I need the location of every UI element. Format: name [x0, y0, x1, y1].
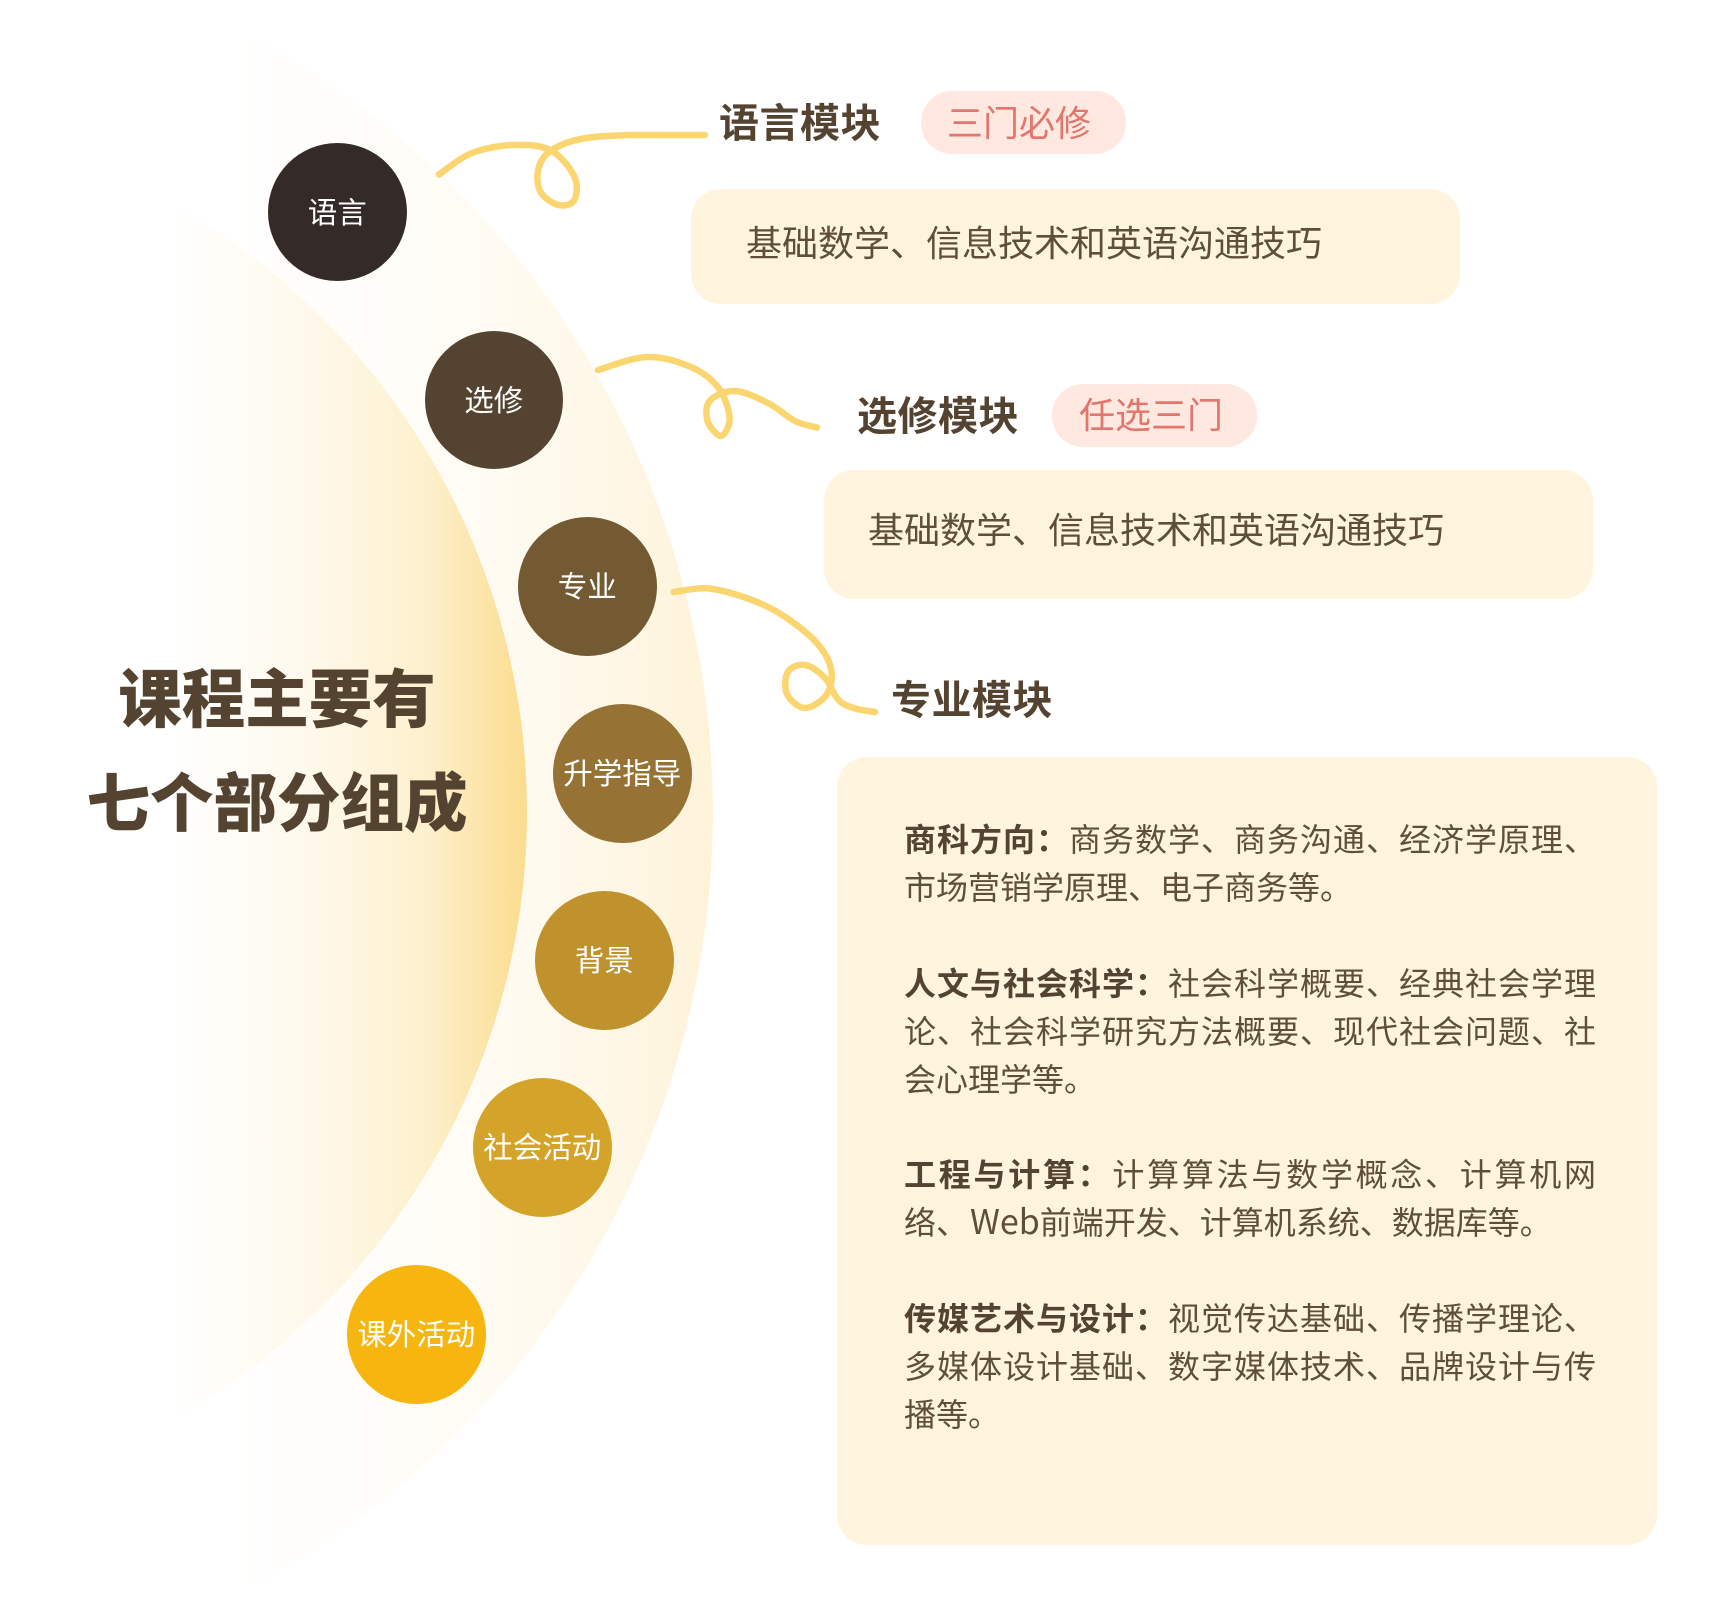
text: major module details: 会心理学等。 — [904, 1062, 1096, 1098]
text: language module: 基础数学、信息技术和英语沟通技巧 — [746, 223, 1322, 264]
text: major module details: 市场营销学原理、电子商务等。 — [904, 870, 1352, 906]
text: major module details: 工程与计算：计算算法与数学概念、计算机网 — [904, 1157, 1596, 1193]
text: major module details: 传媒艺术与设计：视觉传达基础、传播学理论、 — [904, 1301, 1596, 1337]
node: 专业: 专业 — [558, 571, 617, 604]
node: 语言 — [268, 142, 406, 281]
node: 课外活动 — [347, 1265, 486, 1404]
text: major module details: 人文与社会科学：社会科学概要、经典社会学理 — [904, 966, 1596, 1002]
text: major module details: 络、Web前端开发、计算机系统、数据库等。 — [904, 1195, 1552, 1244]
heading: 专业模块: 专业模块 — [891, 679, 1053, 723]
tag: 任选三门: 任选三门 — [1079, 395, 1223, 436]
tag: 三门必修 — [921, 91, 1126, 154]
text: elective module: 基础数学、信息技术和英语沟通技巧 — [868, 510, 1444, 551]
title: 七个部分组成 — [86, 770, 468, 840]
panel: major module — [837, 757, 1657, 1545]
arrow: elective connector — [598, 357, 817, 436]
panel: language module — [691, 189, 1460, 304]
title — [86, 666, 468, 840]
node: 选修: 选修 — [464, 384, 523, 418]
node: 背景 — [535, 891, 674, 1030]
arrow: language connector — [439, 135, 705, 205]
text: major module details: 多媒体设计基础、数字媒体技术、品牌设计与传 — [904, 1349, 1596, 1385]
text: major module details: 播等。 — [904, 1397, 1000, 1433]
heading: 语言模块: 语言模块 — [719, 102, 881, 146]
node: 课外活动: 课外活动 — [357, 1319, 475, 1352]
tag: 三门必修: 三门必修 — [947, 103, 1091, 144]
node: 升学指导 — [553, 704, 692, 842]
node: 社会活动 — [473, 1078, 612, 1216]
panel: elective module — [824, 470, 1593, 599]
tag: 任选三门 — [1052, 384, 1257, 447]
text: major module details: 论、社会科学研究方法概要、现代社会问题、社 — [904, 1014, 1596, 1050]
heading: 选修模块: 选修模块 — [857, 395, 1019, 439]
node: 升学指导: 升学指导 — [563, 758, 681, 791]
node: 选修 — [424, 330, 563, 469]
title: 课程主要有 — [118, 666, 436, 736]
node: 专业 — [518, 517, 656, 656]
arrow: major connector — [674, 588, 875, 712]
node: 语言: 语言 — [308, 196, 367, 230]
text: major module details: 商科方向：商务数学、商务沟通、经济学原理、 — [904, 822, 1596, 858]
node: 社会活动: 社会活动 — [483, 1132, 601, 1165]
node: 背景: 背景 — [575, 945, 634, 978]
